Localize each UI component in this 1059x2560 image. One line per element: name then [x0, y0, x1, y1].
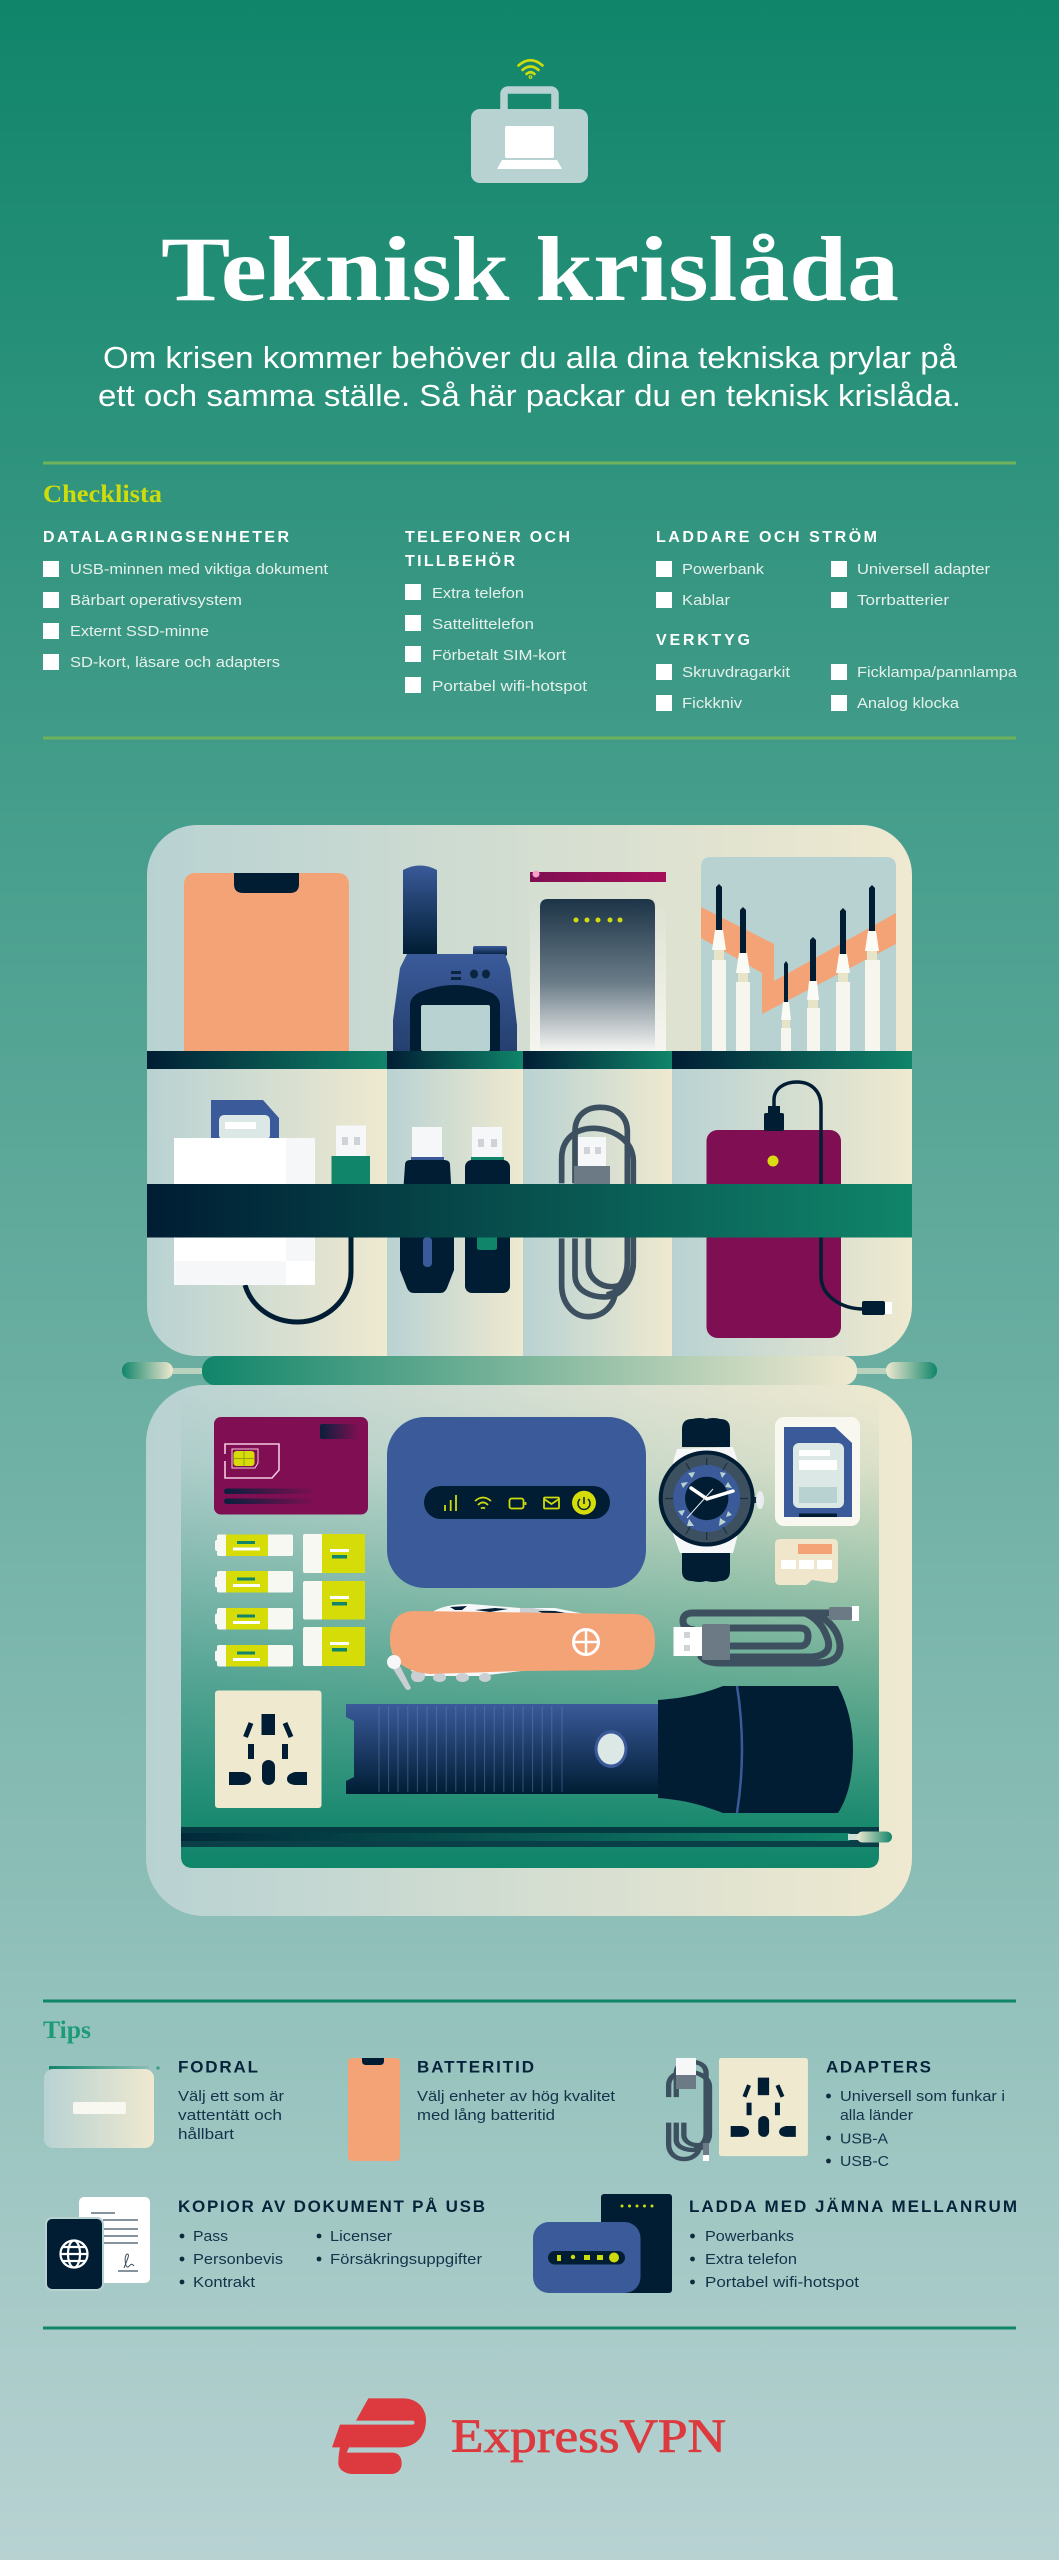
- icon: satellite phone: [393, 866, 517, 1051]
- icon: universal adapter: [215, 1690, 322, 1808]
- tips heading: Tips: [43, 2017, 91, 2044]
- column: verktyg: Ficklampa/pannlampa: [857, 664, 1018, 681]
- column: laddare och ström: Powerbank: [682, 561, 765, 578]
- icon: orange phone: [184, 873, 349, 1051]
- tip: kopior av dokument: Försäkringsuppgifter: [330, 2251, 482, 2268]
- icon: adapter: [719, 2058, 808, 2156]
- zipper: [181, 1827, 892, 1847]
- tip: fodral: hållbart: [178, 2126, 235, 2143]
- tip: fodral: FODRAL: [178, 2058, 258, 2076]
- icon: external SSD with SD card and cable: [174, 1100, 351, 1322]
- intro text: Om krisen kommer behöver du alla dina tekniska prylar på: [103, 340, 958, 375]
- tip: adapters: Universell som funkar i: [840, 2088, 1005, 2105]
- column: telefoner och tillbehör: Förbetalt SIM-kort: [432, 647, 567, 664]
- icon: screwdriver set: [701, 857, 896, 1051]
- tip: ladda med jämna mellanrum: Powerbanks: [705, 2228, 794, 2245]
- tip: kopior av dokument: Kontrakt: [193, 2274, 256, 2291]
- icon: power bank and hotspot: [533, 2194, 672, 2293]
- ExpressVPN logo: [332, 2398, 726, 2474]
- column: verktyg: Skruvdragarkit: [682, 664, 791, 681]
- icon: batteries (right stack): [303, 1534, 365, 1666]
- icon: case: [44, 2066, 160, 2148]
- tip: adapters: alla länder: [840, 2107, 913, 2124]
- base shell: [146, 1385, 912, 1916]
- tip: fodral: vattentätt och: [178, 2107, 282, 2124]
- icon: coiled USB cable: [562, 1107, 633, 1317]
- tip: fodral: [44, 2058, 284, 2148]
- column: verktyg: Analog klocka: [857, 695, 960, 712]
- icon: wifi hotspot: [387, 1417, 646, 1588]
- laptop: [497, 126, 562, 169]
- tip: adapters: USB-C: [840, 2153, 889, 2170]
- case hinge handle: [122, 1356, 937, 1386]
- tip: batteritid: med lång batteritid: [417, 2107, 555, 2124]
- column: laddare och ström: Kablar: [682, 592, 730, 609]
- column: verktyg: [656, 632, 1018, 712]
- tip: ladda med jämna mellanrum: Extra telefon: [705, 2251, 797, 2268]
- tip: adapters: USB-A: [840, 2130, 888, 2148]
- icon: black USB stick with blue slot: [400, 1127, 454, 1293]
- column: verktyg: Fickkniv: [682, 695, 743, 712]
- icon: power bank: [530, 899, 666, 1051]
- icon: USB cable: [674, 1606, 859, 1663]
- column: laddare och ström: Universell adapter: [857, 561, 990, 578]
- icon: SIM card: [214, 1417, 368, 1514]
- tip: fodral: Välj ett som är: [178, 2088, 284, 2105]
- checklist heading: Checklista: [43, 481, 163, 508]
- column: laddare och ström: Torrbatterier: [857, 592, 949, 609]
- column: telefoner och tillbehör: Extra telefon: [432, 585, 524, 602]
- icon: phone: [348, 2058, 400, 2161]
- icon: batteries (left stack): [215, 1534, 293, 1666]
- tip: adapters: [669, 2058, 1005, 2170]
- tip: adapters: ADAPTERS: [826, 2058, 931, 2076]
- logo wordmark: ExpressVPN: [451, 2410, 726, 2463]
- column: laddare och ström: [656, 527, 990, 609]
- icon: flashlight: [346, 1686, 853, 1813]
- column: telefoner och tillbehör: Portabel wifi-hotspot: [432, 678, 588, 695]
- tip: kopior av dokument: Licenser: [330, 2228, 392, 2245]
- column: telefoner och tillbehör: TILLBEHÖR: [405, 551, 515, 570]
- icon: black USB stick with green slot: [465, 1127, 510, 1293]
- tip: ladda med jämna mellanrum: Portabel wifi-hotspot: [705, 2274, 860, 2291]
- tip: batteritid: [348, 2058, 616, 2161]
- case base: lower compartment: [146, 1385, 912, 1916]
- icon: maroon power bank with cable: [706, 1082, 892, 1338]
- icon: tech bag with wifi: [471, 60, 588, 183]
- title: Teknisk krislåda: [161, 218, 899, 320]
- logo mark: [332, 2398, 426, 2474]
- tip: batteritid: Välj enheter av hög kvalitet: [417, 2088, 616, 2105]
- tip: ladda med jämna mellanrum: [533, 2194, 1017, 2293]
- checklist panel: [43, 481, 1018, 712]
- bag body: [471, 109, 588, 183]
- intro text: [98, 340, 961, 413]
- icon: pocket knife: [387, 1604, 655, 1690]
- column: telefoner och tillbehör: Sattelittelefon: [432, 616, 534, 633]
- column: datalagringsenheter: Externt SSD-minne: [70, 623, 209, 640]
- column: datalagringsenheter: DATALAGRINGSENHETER: [43, 529, 289, 546]
- tip: ladda med jämna mellanrum: LADDA MED JÄMNA MELLANRUM: [689, 2197, 1017, 2216]
- column: telefoner och tillbehör: [405, 529, 588, 695]
- tips panel: [43, 2017, 1017, 2293]
- shelf strap: [147, 1051, 912, 1069]
- intro text: ett och samma ställe. Så här packar du en teknisk krislåda.: [98, 378, 961, 413]
- column: datalagringsenheter: [43, 529, 329, 671]
- bag handle: [504, 90, 555, 120]
- tip: kopior av dokument: Pass: [193, 2228, 228, 2245]
- inner panel: [181, 1395, 879, 1868]
- icon: document and phone: [46, 2197, 150, 2290]
- icon: cable: [669, 2058, 710, 2161]
- column: laddare och ström: LADDARE OCH STRÖM: [656, 527, 877, 546]
- column: telefoner och tillbehör: TELEFONER OCH: [405, 529, 570, 546]
- front strap: [147, 1184, 912, 1238]
- column: datalagringsenheter: SD-kort, läsare och adapters: [70, 654, 280, 671]
- tip: kopior av dokument: Personbevis: [193, 2251, 283, 2268]
- icon: microSD card: [775, 1539, 838, 1585]
- tip: kopior av dokument: [46, 2197, 485, 2291]
- open case illustration: [122, 825, 937, 1916]
- icon: SD card: [775, 1417, 860, 1526]
- lid shell: [147, 825, 912, 1356]
- screwdrivers: [712, 884, 880, 1051]
- tip: batteritid: BATTERITID: [417, 2058, 534, 2076]
- icon: wristwatch: [659, 1418, 764, 1582]
- icon: maroon strip with pink dot: [530, 870, 666, 882]
- status icons: [445, 1495, 559, 1511]
- icon: green USB stick: [332, 1126, 370, 1186]
- column: datalagringsenheter: Bärbart operativsystem: [70, 592, 242, 609]
- column: verktyg: VERKTYG: [656, 632, 750, 649]
- icon: wifi: [518, 60, 542, 78]
- column: datalagringsenheter: USB-minnen med viktiga dokument: [70, 561, 329, 578]
- case lid: upper compartment: [147, 825, 912, 1356]
- tip: kopior av dokument: KOPIOR AV DOKUMENT PÅ USB: [178, 2197, 485, 2216]
